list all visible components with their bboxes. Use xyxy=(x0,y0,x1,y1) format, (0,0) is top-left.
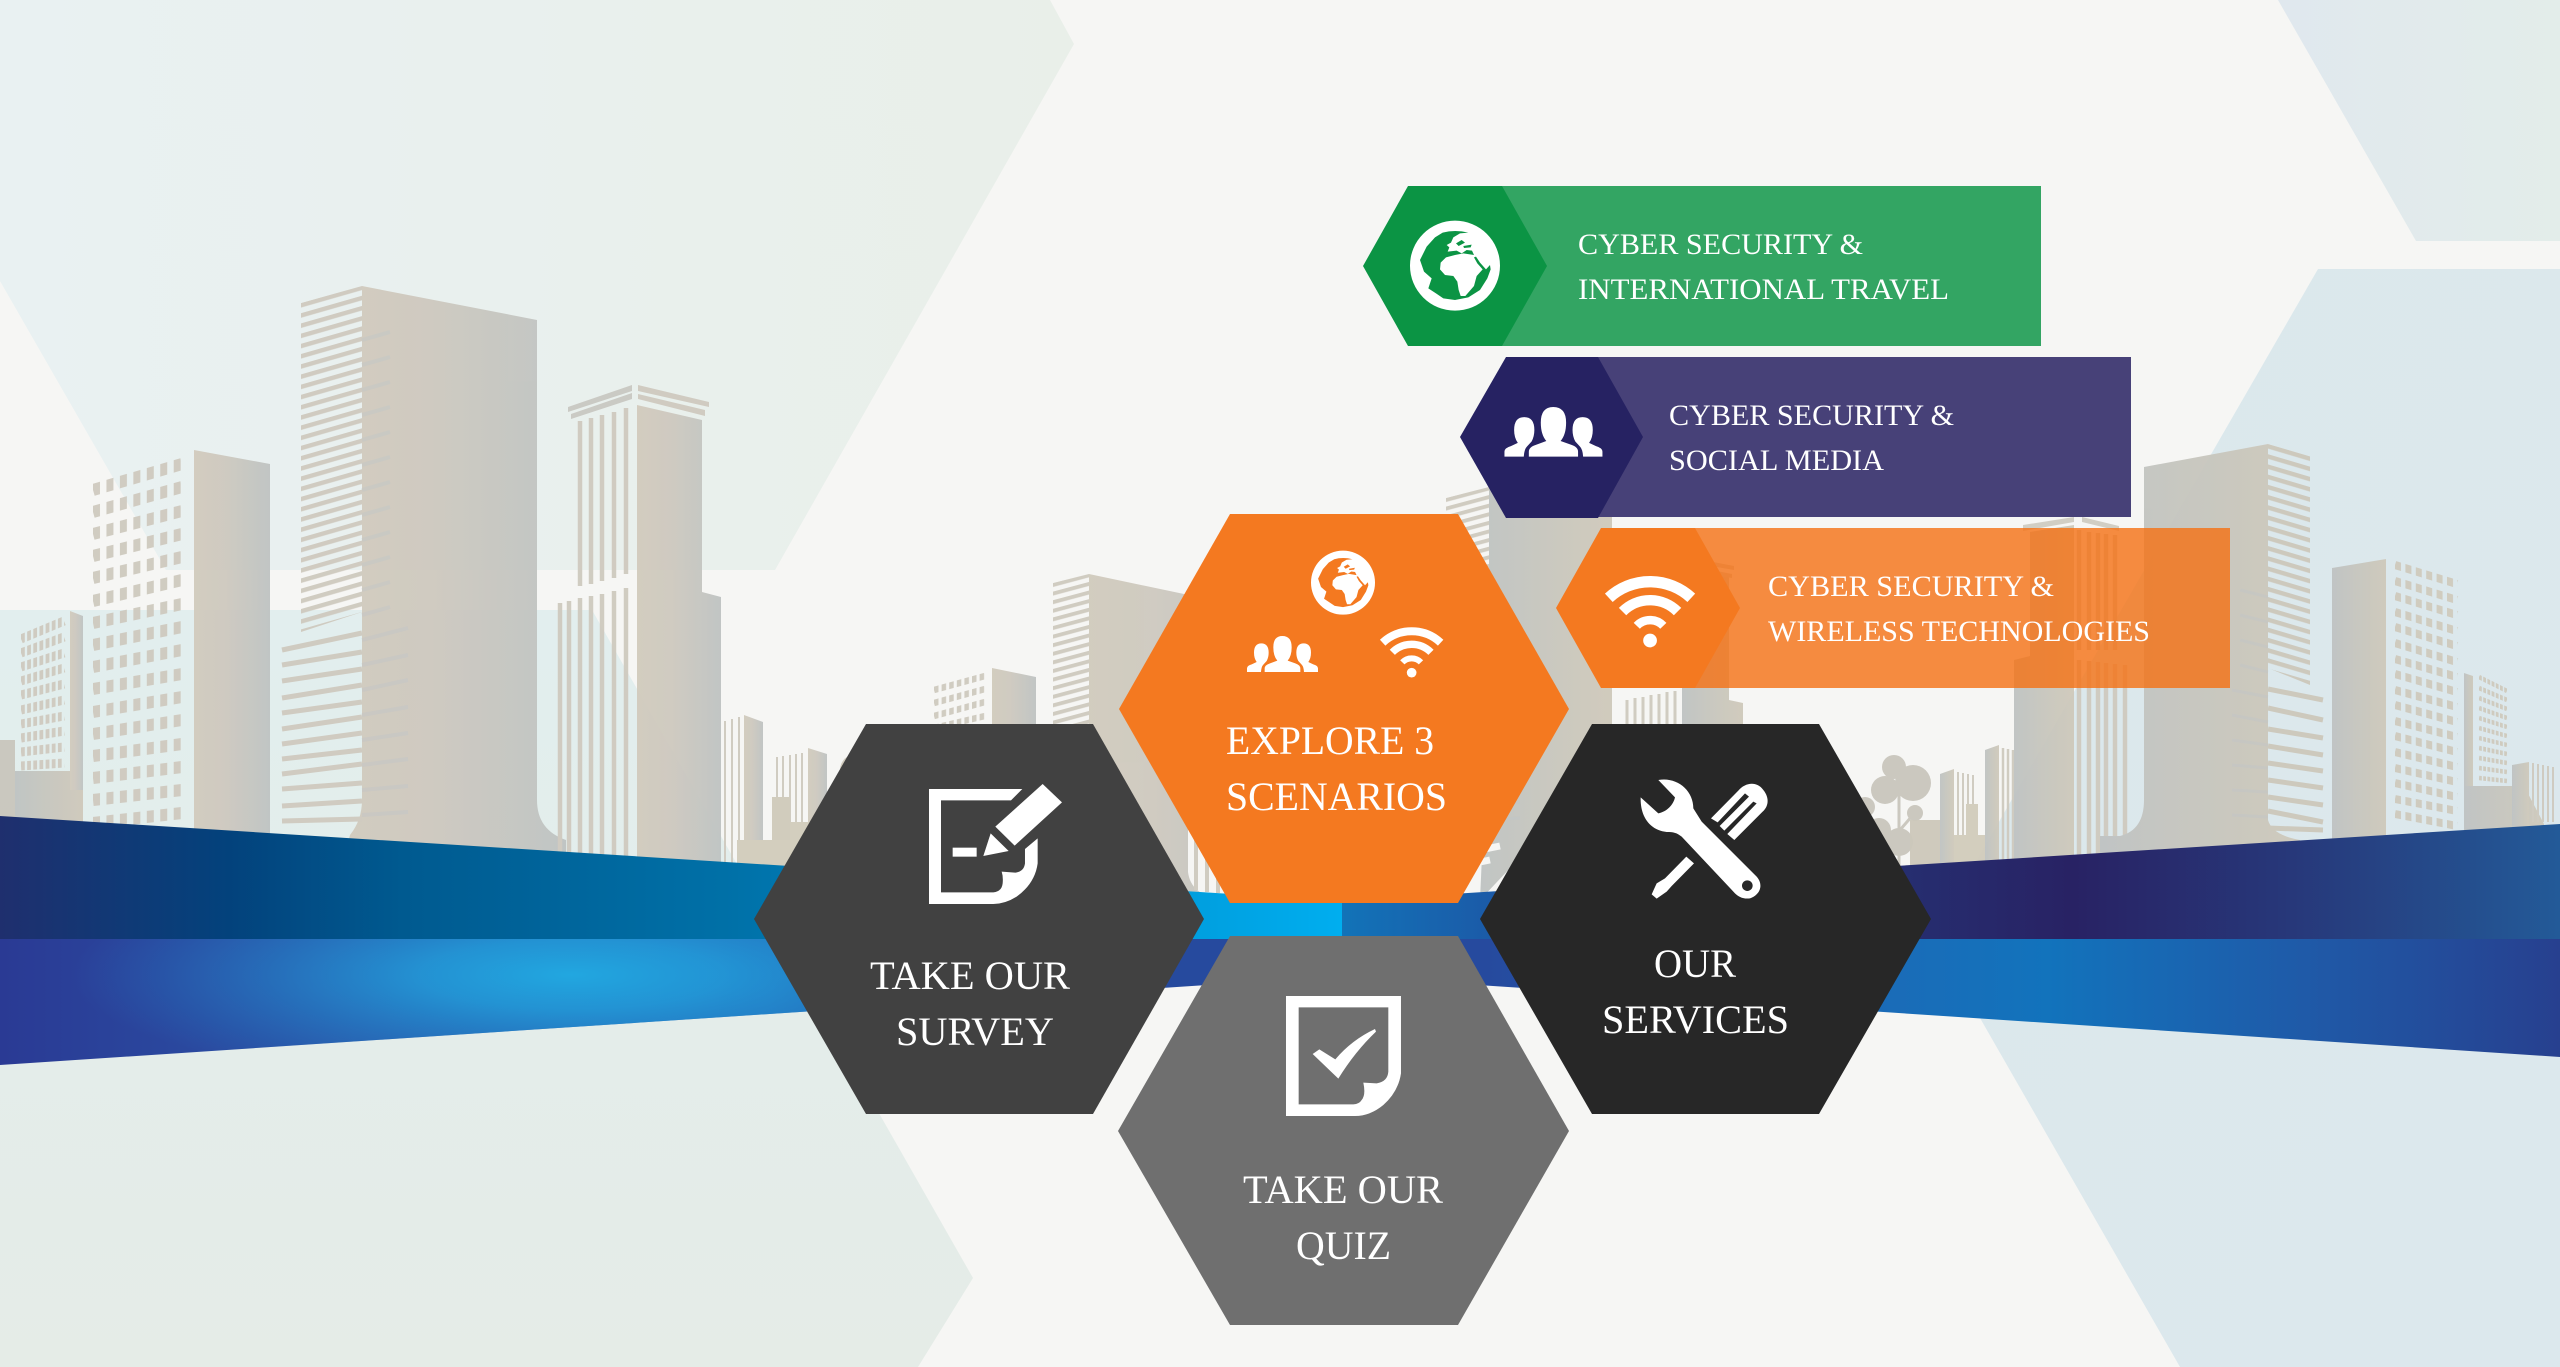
banner text: social media: SOCIAL MEDIA xyxy=(1669,444,1884,477)
banner text: international travel: CYBER SECURITY & xyxy=(1578,228,1863,261)
city skyline: left cluster xyxy=(0,286,872,880)
label: take our quiz: QUIZ xyxy=(1296,1223,1391,1268)
label: explore 3 scenarios xyxy=(1226,718,1447,819)
label: take our survey xyxy=(870,953,1070,1054)
label: take our survey: SURVEY xyxy=(896,1009,1054,1054)
city skyline: centre cluster xyxy=(934,487,1743,900)
icon: wifi small xyxy=(1383,631,1441,677)
background hexagon: upper left xyxy=(0,0,1074,570)
icon: wrench and screwdriver xyxy=(1641,779,1768,899)
blue road band xyxy=(0,816,2560,1065)
label: explore 3 scenarios: EXPLORE 3 xyxy=(1226,718,1434,763)
hexagon: take our quiz xyxy=(1118,936,1569,1325)
icon: globe xyxy=(1410,221,1500,311)
banner: cyber security & wireless technologies xyxy=(1556,528,2230,688)
banner text: social media: CYBER SECURITY & xyxy=(1669,399,1954,432)
label: our services: SERVICES xyxy=(1602,997,1789,1042)
banner text: wireless technologies: WIRELESS TECHNOLOGIES xyxy=(1768,615,2150,648)
banner text: wireless technologies: CYBER SECURITY & xyxy=(1768,570,2054,603)
label: explore 3 scenarios: SCENARIOS xyxy=(1226,774,1447,819)
background hexagon: right xyxy=(1933,269,2560,1367)
icon: pencil and note xyxy=(929,784,1062,904)
banner text: wireless technologies xyxy=(1768,570,2150,648)
banner text: social media xyxy=(1669,399,1954,477)
icon: wifi xyxy=(1609,582,1691,647)
label: our services: OUR xyxy=(1654,941,1736,986)
hexagon: take our survey xyxy=(754,724,1204,1114)
label: our services xyxy=(1602,941,1789,1042)
label: take our quiz xyxy=(1243,1167,1443,1268)
label: take our survey: TAKE OUR xyxy=(870,953,1070,998)
banner: cyber security & international travel xyxy=(1363,186,2041,346)
banner text: international travel xyxy=(1578,228,1949,306)
hexagon: our services xyxy=(1480,724,1931,1114)
background hexagon: lower left xyxy=(0,610,973,1367)
icon: globe small xyxy=(1311,551,1375,615)
tree group xyxy=(1855,755,1931,870)
city skyline: right cluster xyxy=(1910,444,2553,880)
icon: checklist note xyxy=(1286,996,1401,1116)
icon: people xyxy=(1504,407,1602,457)
hexagon: explore 3 scenarios xyxy=(1119,514,1569,903)
background hexagon: top right xyxy=(2278,0,2560,241)
banner text: international travel: INTERNATIONAL TRAVEL xyxy=(1578,273,1949,306)
icon: people small xyxy=(1247,636,1318,672)
banner: cyber security & social media xyxy=(1460,357,2131,518)
label: take our quiz: TAKE OUR xyxy=(1243,1167,1443,1212)
